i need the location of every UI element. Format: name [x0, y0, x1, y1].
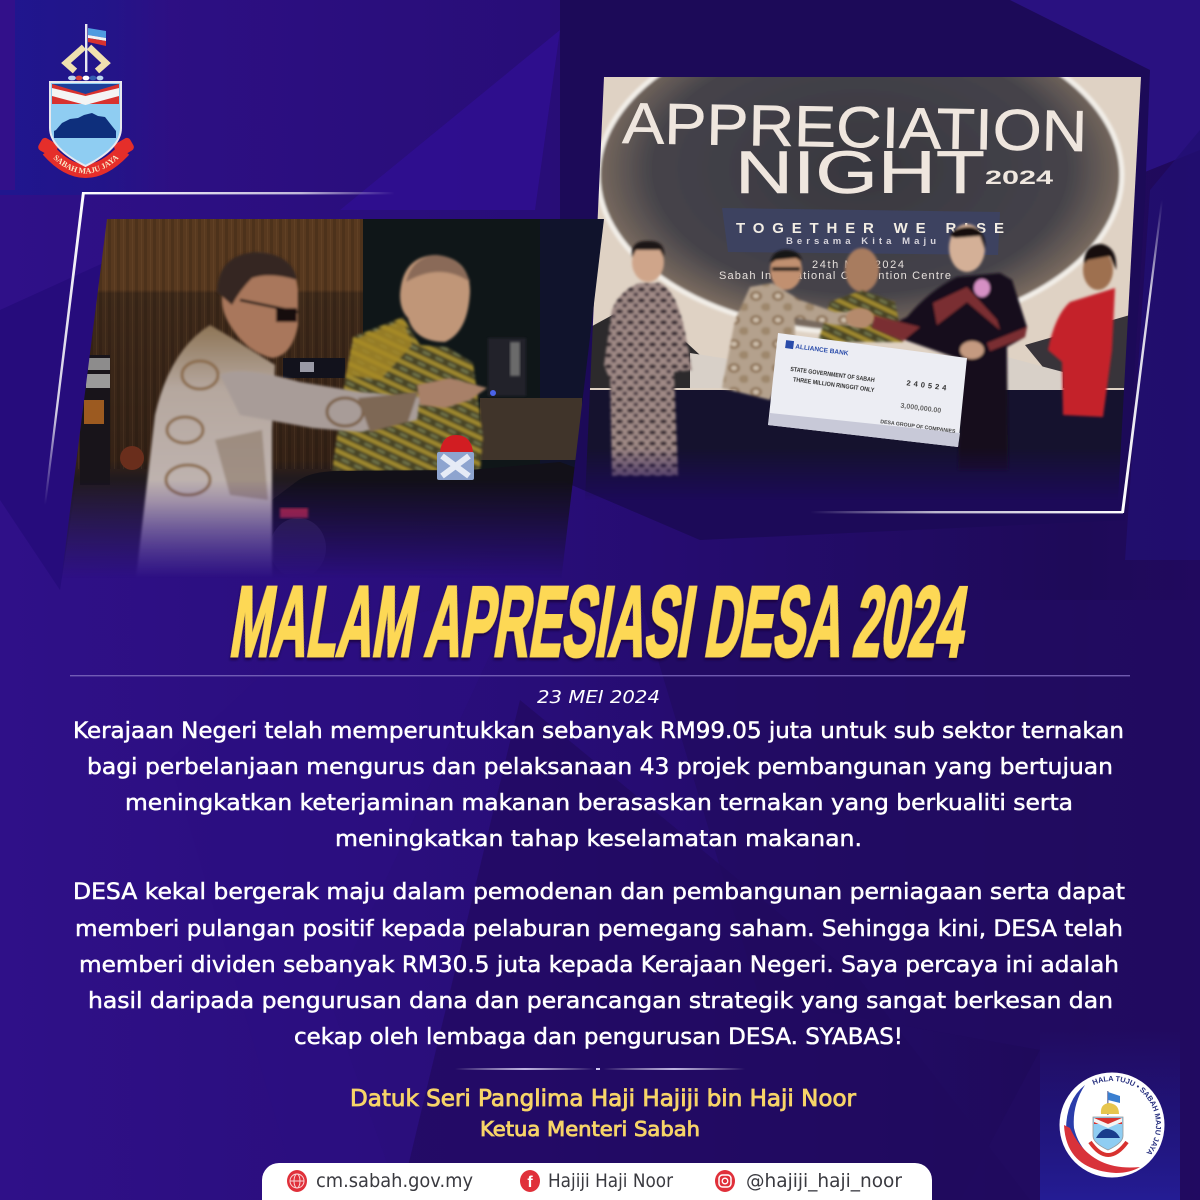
title divider: [70, 675, 1130, 676]
photo event title: 24th May 2024: [812, 259, 904, 271]
photo event title: 2024: [985, 168, 1054, 189]
instagram text: @hajiji_haji_noor: [746, 1170, 902, 1192]
paragraph 2: DESA kekal bergerak maju dalam pemodenan dan pembangunan perniagaan serta dapat: [73, 880, 1125, 905]
paragraph 2: [73, 880, 1125, 1050]
mock cheque: 240524: [906, 378, 950, 393]
facebook text: Hajiji Haji Noor: [548, 1170, 673, 1192]
mock cheque: DESA GROUP OF COMPANIES: [880, 419, 956, 435]
frame: right photo outline: [810, 200, 1163, 513]
person: man centre: [818, 248, 903, 342]
person: man in batik: [722, 250, 867, 400]
photo event title: Sabah International Convention Centre: [719, 270, 951, 282]
paragraph 1: meningkatkan tahap keselamatan makanan.: [335, 827, 862, 852]
person: man in yellow batik: [332, 255, 483, 471]
photo backdrop: [586, 77, 1141, 494]
photo event title: TOGETHER WE RISE: [736, 220, 1004, 237]
icon: facebook: f: [527, 1174, 533, 1191]
person: man in cream batik: [136, 252, 298, 578]
paragraph 2: cekap oleh lembaga dan pengurusan DESA. SYABAS!: [294, 1025, 903, 1050]
person: man in black: [872, 224, 1027, 470]
speaker role: Ketua Menteri Sabah: [480, 1117, 700, 1141]
photo event title: APPRECIATION: [622, 91, 1088, 164]
icon: facebook: [520, 1170, 540, 1192]
badge crest: [1090, 1091, 1127, 1155]
crest flag and arms: [66, 24, 106, 80]
handshake: [846, 308, 874, 328]
paragraph 1: Kerajaan Negeri telah memperuntukkan sebanyak RM99.05 juta untuk sub sektor ternakan: [73, 719, 1124, 744]
person: extended arm: [220, 371, 487, 432]
person: man in red: [1048, 244, 1116, 417]
badge: Hala Tuju Sabah Maju Jaya: HALA TUJU • SABAH MAJU JAYA: [1092, 1076, 1161, 1154]
photo event title: NIGHT: [735, 139, 985, 206]
crest: Sabah coat of arms: [38, 24, 134, 178]
badge: Hala Tuju Sabah Maju Jaya: [1060, 1072, 1164, 1178]
paragraph 1: meningkatkan keterjaminan makanan berasaskan ternakan yang berkualiti serta: [125, 791, 1073, 816]
paragraph 1: bagi perbelanjaan mengurus dan pelaksanaan 43 projek pembangunan yang bertujuan: [87, 755, 1113, 780]
photo event title: [622, 91, 1088, 282]
crest ribbon: SABAH MAJU JAYA: [54, 155, 119, 174]
signature divider: [455, 1068, 745, 1070]
mock cheque: 3,000,000.00: [900, 403, 942, 415]
contact bar: [262, 1163, 932, 1200]
photo: launch gimmick: [60, 219, 610, 590]
crest shield: [50, 82, 121, 166]
paragraph 1: [73, 719, 1124, 852]
icon: website: [287, 1170, 307, 1192]
website text: cm.sabah.gov.my: [316, 1170, 473, 1192]
photo: cheque presentation: [586, 77, 1141, 494]
photo background: [60, 219, 610, 590]
icon: instagram: [715, 1170, 735, 1192]
crest ribbon: [38, 138, 134, 178]
paragraph 2: memberi dividen sebanyak RM30.5 juta kepada Kerajaan Negeri. Saya percaya ini adalah: [79, 953, 1119, 978]
mock cheque: [768, 333, 967, 447]
table with launch button: [272, 435, 574, 548]
speaker name: Datuk Seri Panglima Haji Hajiji bin Haji Noor: [350, 1086, 857, 1112]
date: 23 MEI 2024: [537, 687, 660, 708]
mock cheque: THREE MILLION RINGGIT ONLY: [793, 376, 876, 394]
mock cheque: ALLIANCE BANK: [795, 343, 849, 357]
paragraph 2: memberi pulangan positif kepada pelaburan pemegang saham. Sehingga kini, DESA telah: [75, 917, 1123, 942]
paragraph 2: hasil daripada pengurusan dana dan perancangan strategik yang sangat berkesan dan: [88, 989, 1113, 1014]
frame: left photo outline: [44, 192, 395, 505]
mock cheque: STATE GOVERNMENT OF SABAH: [790, 366, 876, 384]
photo event title: Bersama Kita Maju: [786, 236, 936, 247]
person: woman left: [604, 241, 692, 476]
